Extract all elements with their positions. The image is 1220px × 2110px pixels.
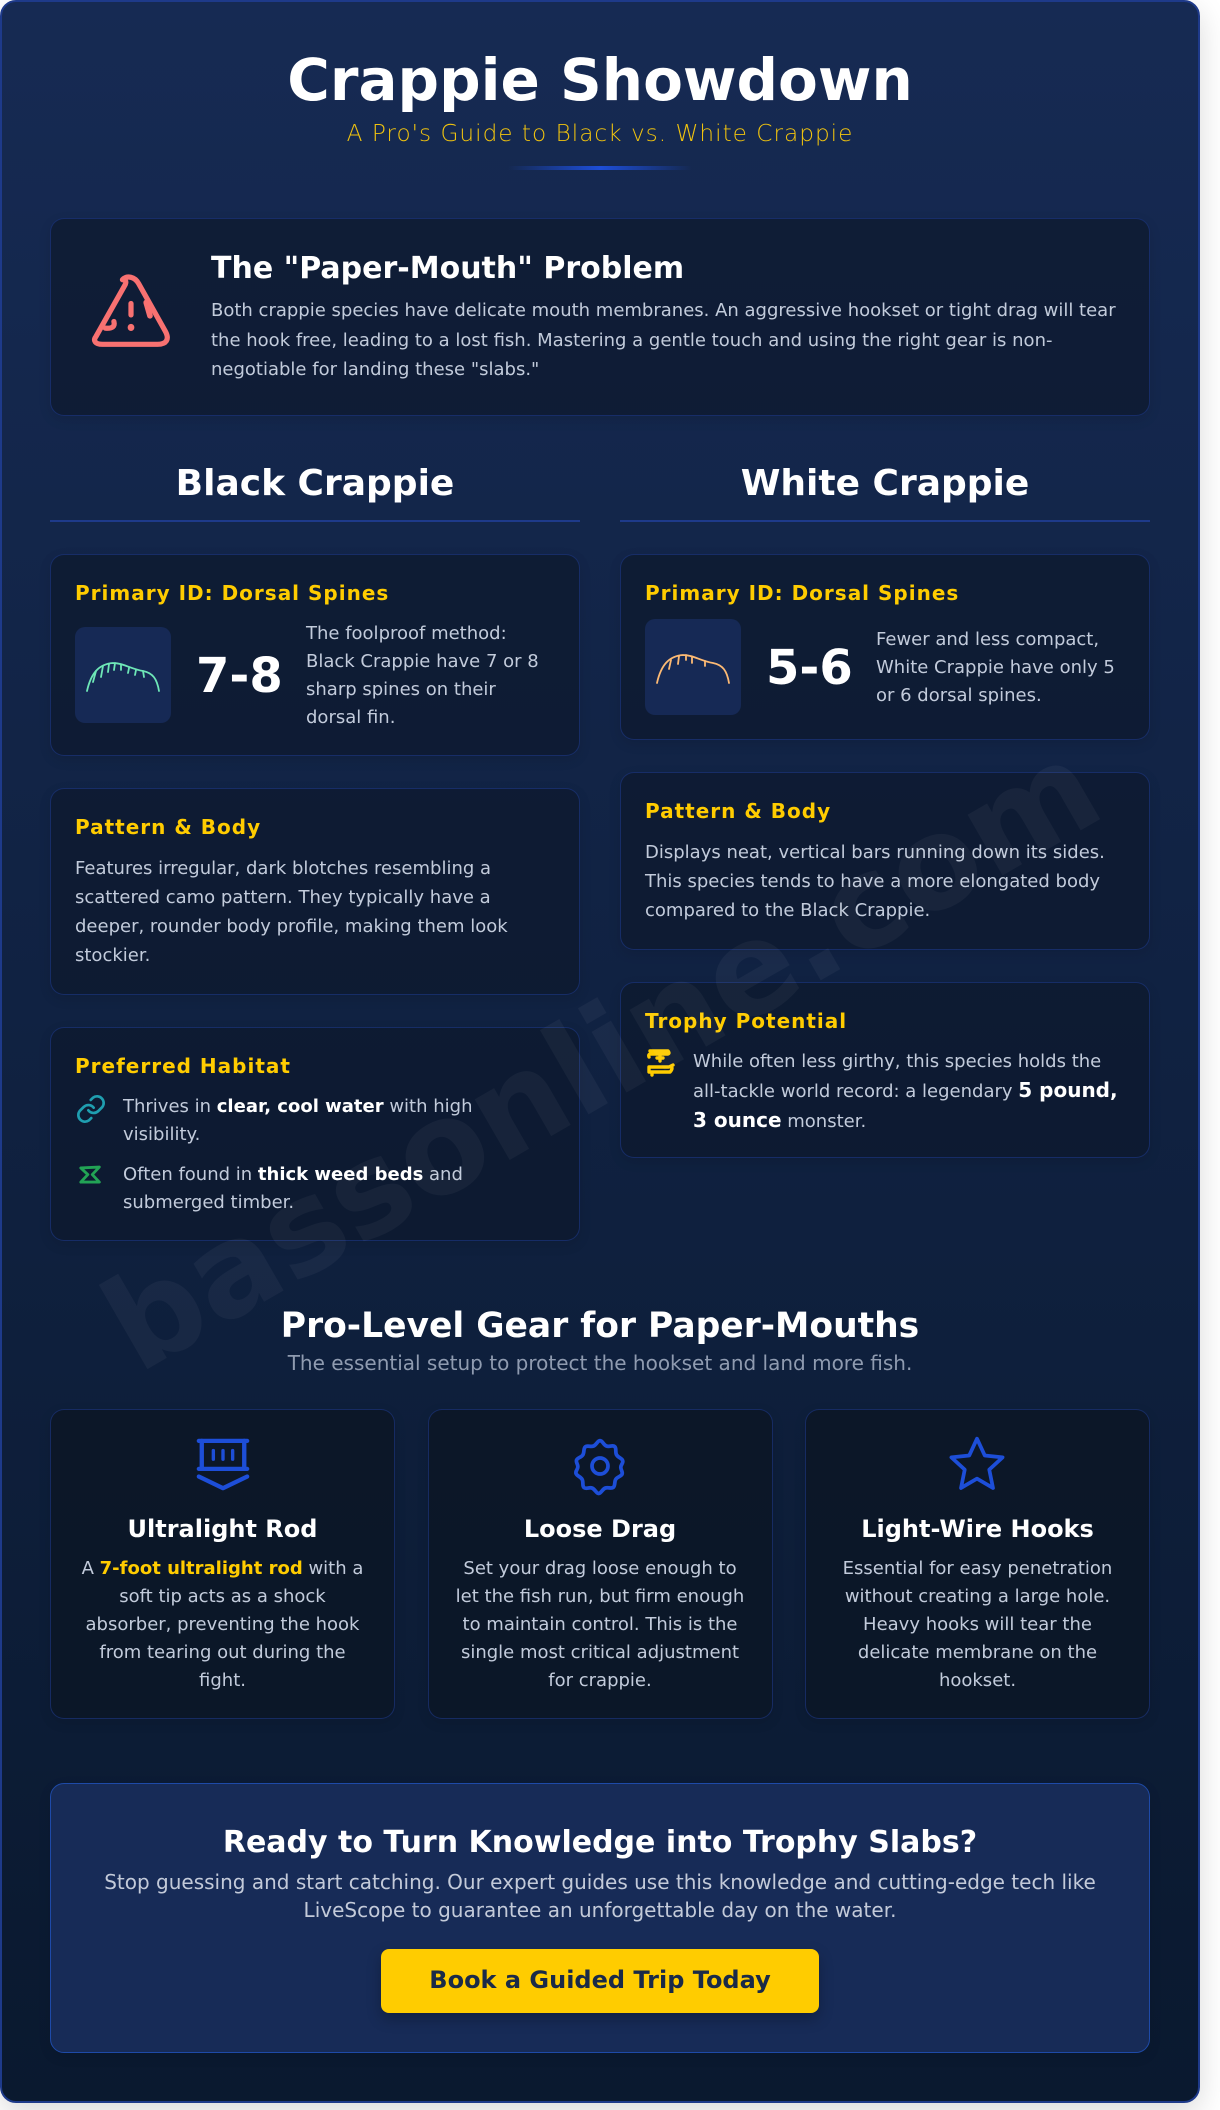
cta text: Stop guessing and start catching. Our expert guides use this knowledge and cutting-edge tech like [104,1870,1096,1894]
panel: white crappie pattern and body [620,772,1150,950]
spine description: Fewer and less compact, [876,629,1099,650]
habitat text: clear water: Thrives in clear, cool water with high [123,1096,472,1117]
habitat text: weed beds: Often found in thick weed beds and [123,1164,463,1185]
spine description: or 6 dorsal spines. [876,685,1042,706]
pattern text: deeper, rounder body profile, making them look [75,916,508,937]
panel: preferred habitat [50,1027,580,1241]
heading: white crappie: White Crappie [741,463,1029,504]
cta button [381,1949,819,2013]
gear section subheading: The essential setup to protect the hookset and land more fish. [288,1351,912,1375]
habitat text: weed beds [123,1164,463,1213]
title accent bar [508,166,692,170]
card text: delicate membrane on the [858,1642,1097,1663]
heading: black crappie: Black Crappie [176,463,454,504]
heading: white crappie [620,462,1150,522]
icon: link [77,1095,105,1123]
card heading: Loose Drag [524,1515,676,1543]
pattern text: scattered camo pattern. They typically have a [75,887,491,908]
alert body: Both crappie species have delicate mouth membranes. An aggressive hookset or tight drag will tear [211,300,1116,321]
card text: Heavy hooks will tear the [863,1614,1092,1635]
stat: 7-8 spines: 7-8 [196,648,283,704]
icon: gear [574,1438,625,1496]
card text: soft tip acts as a shock [119,1586,326,1607]
panel: loose drag [428,1409,772,1719]
habitat text: weed beds: submerged timber. [123,1192,294,1213]
card heading: Light-Wire Hooks [861,1515,1094,1543]
watermark: bassonline.com [79,712,1124,1401]
spine description: White Crappie have only 5 [876,657,1115,678]
label: Pattern & Body [645,799,831,823]
label: Preferred Habitat [75,1054,291,1078]
panel: paper-mouth problem [50,218,1150,416]
icon: weed [79,1166,101,1184]
pattern text [75,858,508,966]
pattern text: Displays neat, vertical bars running down its sides. [645,842,1105,863]
card text: single most critical adjustment [461,1642,739,1663]
card text: for crappie. [548,1670,652,1691]
trophy text [693,1051,1118,1132]
panel: white crappie dorsal spines [620,554,1150,740]
panel: black crappie pattern and body [50,788,580,995]
pattern text: This species tends to have a more elongated body [645,871,1100,892]
card text: Set your drag loose enough to [463,1558,737,1579]
title: Crappie Showdown [287,46,913,114]
alert heading: The "Paper-Mouth" Problem [211,251,684,286]
alert body: negotiable for landing these "slabs." [211,359,539,380]
alert body: the hook free, leading to a lost fish. Mastering a gentle touch and using the right gear is non- [211,330,1052,350]
icon: warning triangle [92,274,170,347]
cta text [104,1870,1096,1922]
card text: let the fish run, but firm enough [456,1586,744,1607]
card text: A 7-foot ultralight rod with a [82,1558,363,1579]
gear section heading: Pro-Level Gear for Paper-Mouths [281,1306,919,1346]
subtitle: A Pro's Guide to Black vs. White Crappie [347,120,853,147]
card text: to maintain control. This is the [463,1614,737,1635]
pattern text: compared to the Black Crappie. [645,900,930,921]
pattern text: stockier. [75,945,150,966]
card text: Essential for easy penetration [843,1558,1112,1579]
card text: fight. [199,1670,246,1691]
cta heading: Ready to Turn Knowledge into Trophy Slabs? [223,1825,977,1860]
card text: hookset. [939,1670,1016,1691]
heading: black crappie [50,462,580,522]
card text [82,1558,363,1691]
label: Primary ID: Dorsal Spines [645,581,959,605]
pattern text [644,842,1105,921]
habitat text: clear water [122,1096,472,1145]
card text [843,1558,1112,1691]
icon: black crappie dorsal fin [75,627,171,723]
stat: 5-6 spines: 5-6 [766,640,853,696]
card text: absorber, preventing the hook [86,1614,359,1635]
spine description: dorsal fin. [306,707,395,728]
habitat text: clear water: visibility. [123,1124,200,1145]
trophy text: While often less girthy, this species holds the [693,1051,1101,1072]
panel: light-wire hooks [805,1409,1150,1719]
card text: from tearing out during the [99,1642,346,1663]
card heading: Ultralight Rod [128,1515,317,1543]
spine description [876,629,1115,706]
spine description [306,623,539,728]
label: Trophy Potential [645,1009,847,1033]
panel: black crappie dorsal spines [50,554,580,756]
trophy text: 3 ounce monster. [693,1108,866,1132]
panel: trophy potential [620,982,1150,1158]
cta button: Book a Guided Trip Today [429,1966,771,1994]
icon: trophy fish [647,1049,675,1077]
panel: call to action [50,1783,1150,2053]
card text [456,1558,744,1691]
pattern text: Features irregular, dark blotches resembling a [75,858,491,879]
trophy text: all-tackle world record: a legendary 5 pound, [693,1078,1118,1102]
panel: ultralight rod [50,1409,395,1719]
alert body [211,300,1116,380]
label: Primary ID: Dorsal Spines [75,581,389,605]
icon: rod [196,1438,250,1490]
cta text: LiveScope to guarantee an unforgettable day on the water. [304,1898,896,1922]
icon: star [949,1436,1004,1490]
card text: without creating a large hole. [845,1586,1110,1607]
spine description: sharp spines on their [306,679,496,700]
spine description: The foolproof method: [306,623,507,644]
spine description: Black Crappie have 7 or 8 [306,651,539,672]
icon: white crappie dorsal fin [645,619,741,715]
label: Pattern & Body [75,815,261,839]
